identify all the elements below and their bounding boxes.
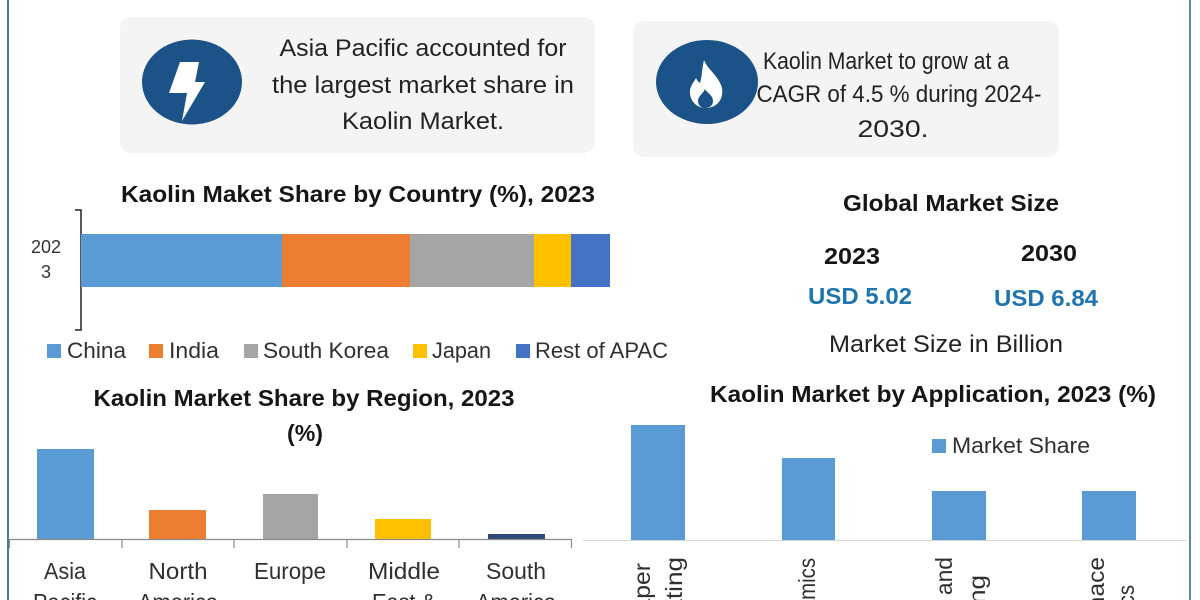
heading: share by country: Kaolin Maket Share by Country (%), 2023 <box>121 181 595 207</box>
stat: 2023 market size: 2023 <box>824 243 880 269</box>
stacked bar chart: country share <box>31 210 610 330</box>
icon: flame <box>656 40 758 124</box>
panel: CAGR callout <box>633 21 1059 157</box>
stat: 2030 market size: 2030 <box>1021 240 1077 266</box>
bar chart: region share: Europe <box>254 558 326 584</box>
stacked bar chart: country share: 3 <box>41 262 51 282</box>
bar chart: region share <box>9 449 572 600</box>
legend: country share <box>47 338 668 363</box>
bar chart: application share <box>583 425 1186 600</box>
panel: Asia Pacific callout <box>120 17 595 153</box>
callout text: Asia Pacific: Asia Pacific accounted for <box>280 35 567 62</box>
heading: share by region <box>94 385 514 446</box>
legend: country share: South Korea <box>263 338 390 363</box>
heading: market by application: Kaolin Market by Application, 2023 (%) <box>710 381 1156 407</box>
bar chart: region share: Middle <box>368 558 440 584</box>
legend: country share: China <box>67 338 127 363</box>
bar chart: region share: Asia <box>44 558 86 584</box>
callout text: CAGR: CAGR of 4.5 % during 2024- <box>756 81 1042 108</box>
bar chart: region share: South <box>486 558 546 584</box>
caption: market size unit: Market Size in Billion <box>829 331 1063 358</box>
heading: global market size: Global Market Size <box>843 190 1059 216</box>
legend: country share: India <box>169 338 220 363</box>
callout text: CAGR: 2030. <box>858 116 928 143</box>
heading: share by region: (%) <box>287 420 323 446</box>
stat: 2030 market size: USD 6.84 <box>994 285 1098 311</box>
callout text: Asia Pacific <box>272 35 574 135</box>
legend: market share: Market Share <box>952 433 1090 458</box>
callout text: Asia Pacific: Kaolin Market. <box>342 108 504 135</box>
stat: 2023 market size: USD 5.02 <box>808 283 912 309</box>
legend: country share: Rest of APAC <box>535 338 668 363</box>
stat: 2023 market size <box>808 243 912 309</box>
icon: lightning bolt <box>142 40 242 124</box>
legend: country share: Japan <box>432 338 491 363</box>
callout text: Asia Pacific: the largest market share in <box>272 72 574 99</box>
stat: 2030 market size <box>994 240 1098 311</box>
bar chart: region share: North <box>148 558 208 584</box>
callout text: CAGR: Kaolin Market to grow at a <box>763 48 1010 75</box>
stacked bar chart: country share: 202 <box>31 237 61 257</box>
callout text: CAGR <box>756 48 1042 143</box>
heading: share by region: Kaolin Market Share by Region, 2023 <box>94 385 514 411</box>
